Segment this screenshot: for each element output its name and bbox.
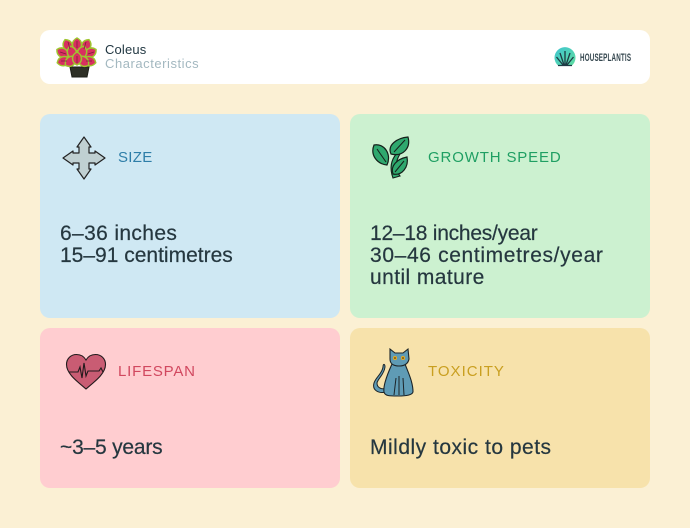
icon: logo badge [554,47,576,66]
text: size values: 6–36 inches [60,222,177,245]
title: Coleus: Coleus [105,42,146,57]
text: toxicity value: Mildly toxic to pets [370,436,552,459]
text: size values [60,222,233,267]
text: growth speed values: 30–46 centimetres/year [370,244,604,267]
text: lifespan value: ~3–5 years [60,436,162,459]
heading: growth speed: GROWTH SPEED [428,149,562,166]
panel: growth speed [350,114,650,318]
text: growth speed values [370,222,604,289]
icon: coleus plant in pot [56,37,97,78]
logo: Houseplantis [554,47,631,66]
text: size values: 15–91 centimetres [60,244,233,267]
panel: size [40,114,340,318]
icon: heart with pulse [66,354,106,390]
text: growth speed values: until mature [370,266,485,289]
header bar [40,30,650,84]
panel: toxicity [350,328,650,488]
heading: lifespan: LIFESPAN [118,363,196,380]
subtitle: Characteristics: Characteristics [105,56,199,71]
text: growth speed values: 12–18 inches/year [370,222,538,245]
logo wordmark: HOUSEPLANTIS [580,52,631,64]
icon: sprout [372,136,410,179]
icon: sitting cat [373,348,414,396]
heading: toxicity: TOXICITY [428,363,505,380]
panel: lifespan [40,328,340,488]
icon: four-way arrows [62,136,106,180]
heading: size: SIZE [118,149,153,166]
